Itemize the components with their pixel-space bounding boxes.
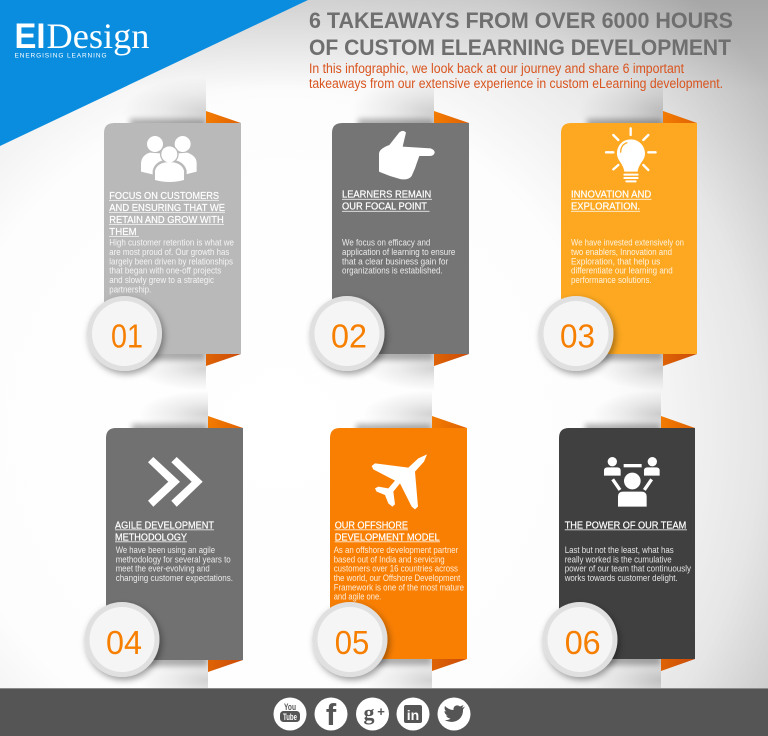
icon: airplane [372, 454, 427, 509]
heading 1: AND ENSURING THAT WE [109, 202, 225, 214]
number badge 03 [538, 296, 614, 371]
body text 2: application of learning to ensure [342, 247, 455, 257]
heading 5: DEVELOPMENT MODEL [335, 531, 440, 543]
intro text [309, 61, 723, 91]
heading 4: METHODOLOGY [115, 531, 187, 543]
panel: card 5 offshore [312, 416, 467, 677]
body text 2: organizations is established. [342, 266, 443, 276]
body text 6: power of our team that continuously [565, 564, 691, 574]
body text 1 [109, 238, 234, 294]
body text 4: changing customer expectations. [116, 573, 233, 583]
body text 1: partnership. [109, 284, 151, 294]
body text 5 [334, 545, 464, 602]
logo: EIDesign: Design [46, 16, 150, 56]
body text 3: two enablers, Innovation and [571, 247, 672, 257]
logo: EIDesign [14, 16, 150, 60]
icon: double chevron [148, 457, 203, 507]
icon: LinkedIn: in [407, 707, 419, 723]
heading 2: OUR FOCAL POINT [342, 201, 428, 213]
body text 6: Last but not the least, what has [565, 545, 674, 555]
heading 4 [115, 519, 215, 543]
body text 4: methodology for several years to [116, 554, 231, 564]
body text 1: that began with one-off projects [109, 266, 222, 276]
heading 5 [335, 519, 440, 543]
number badge 06 [542, 602, 618, 677]
heading 1: THEM [109, 226, 137, 238]
icon: light bulb [606, 128, 656, 181]
body text 5: As an offshore development partner [334, 545, 458, 555]
card body 3 [561, 123, 697, 354]
number badge 04: 04 [106, 624, 142, 661]
number badge 01 [87, 296, 162, 371]
body text 1: High customer retention is what we [109, 238, 234, 248]
panel: card 2 learners [310, 111, 469, 371]
number badge 05: 05 [335, 624, 369, 661]
logo: EIDesign: ENERGISING LEARNING [14, 52, 106, 60]
card body 4 [106, 428, 243, 660]
heading 6: THE POWER OF OUR TEAM [565, 519, 686, 531]
icon: Facebook [314, 697, 348, 732]
icon: LinkedIn [396, 698, 430, 730]
panel: card 3 innovation [538, 111, 697, 371]
blue corner banner with logo [0, 0, 308, 146]
number badge 03: 03 [560, 317, 595, 354]
body text 1: and slowly grew to a strategic [109, 275, 214, 285]
footer bar [0, 688, 768, 736]
body text 4 [116, 545, 233, 583]
card body 2 [332, 123, 469, 354]
heading 5: OUR OFFSHORE [335, 519, 408, 531]
card body 5 [330, 428, 467, 659]
body text 2 [342, 238, 455, 276]
body text 5: the world, our Offshore Development [334, 573, 461, 583]
number badge 02 [310, 296, 384, 371]
icon: Google Plus: + [377, 704, 385, 719]
heading 1 [109, 190, 225, 238]
intro text: In this infographic, we look back at our journey and share 6 important [309, 61, 684, 76]
body text 3: performance solutions. [571, 275, 652, 285]
body text 5: Framework is one of the most mature [334, 582, 464, 592]
panel: card 1 customers [87, 111, 241, 371]
heading 4: AGILE DEVELOPMENT [115, 519, 215, 531]
heading 1: FOCUS ON CUSTOMERS [109, 190, 219, 202]
icon: Google Plus: g [364, 700, 374, 725]
icon: Twitter [438, 698, 470, 730]
body text 3 [571, 238, 684, 285]
body text 2: We focus on efficacy and [342, 238, 430, 248]
number badge 01: 01 [111, 317, 143, 354]
panel: card 4 agile [84, 416, 243, 677]
heading 3: EXPLORATION. [571, 201, 640, 213]
number badge 06: 06 [565, 624, 601, 661]
logo: EIDesign: EI [14, 17, 46, 56]
heading 3 [571, 189, 652, 213]
number badge 05 [312, 602, 388, 677]
body text 3: Exploration, that help us [571, 256, 661, 266]
body text 2: that a clear business gain for [342, 256, 448, 266]
body text 1: largely been driven by relationships [109, 256, 233, 266]
body text 5: and agile one. [334, 592, 381, 602]
icon: Facebook: f [326, 697, 337, 732]
number badge 02: 02 [331, 317, 367, 354]
heading 2: LEARNERS REMAIN [342, 189, 431, 201]
icon: group of people [141, 136, 197, 182]
icon: YouTube: Tube [283, 712, 297, 722]
title: 6 TAKEAWAYS FROM OVER 6000 HOURS [309, 8, 733, 33]
heading 1: RETAIN AND GROW WITH [109, 214, 224, 226]
number badge 04 [84, 602, 160, 677]
icon: YouTube: You [284, 702, 296, 712]
body text 5: customers over 16 countries across [334, 564, 458, 574]
heading 3: INNOVATION AND [571, 189, 652, 201]
card body 6 [559, 428, 695, 659]
body text 5: based out of India and servicing [334, 554, 445, 564]
icon: team [604, 457, 660, 507]
intro text: takeaways from our extensive experience in custom eLearning development. [309, 76, 723, 91]
card body 1 [104, 123, 241, 354]
body text 4: We have been using an agile [116, 545, 215, 555]
body text 3: differentiate our learning and [571, 266, 673, 276]
body text 4: meet the ever-evolving and [116, 564, 210, 574]
title [309, 8, 733, 60]
body text 3: We have invested extensively on [571, 238, 684, 248]
heading 2 [342, 189, 432, 213]
icon: pointing hand [379, 131, 435, 179]
body text 6: really worked is the cumulative [565, 554, 672, 564]
icon: YouTube [274, 698, 306, 730]
body text 6 [564, 545, 691, 583]
body text 6: works towards customer delight. [564, 573, 678, 583]
icon: Google Plus [356, 698, 389, 730]
title: OF CUSTOM ELEARNING DEVELOPMENT [309, 35, 732, 60]
body text 1: are most proud of. Our growth has [109, 247, 230, 257]
panel: card 6 team [542, 416, 695, 677]
